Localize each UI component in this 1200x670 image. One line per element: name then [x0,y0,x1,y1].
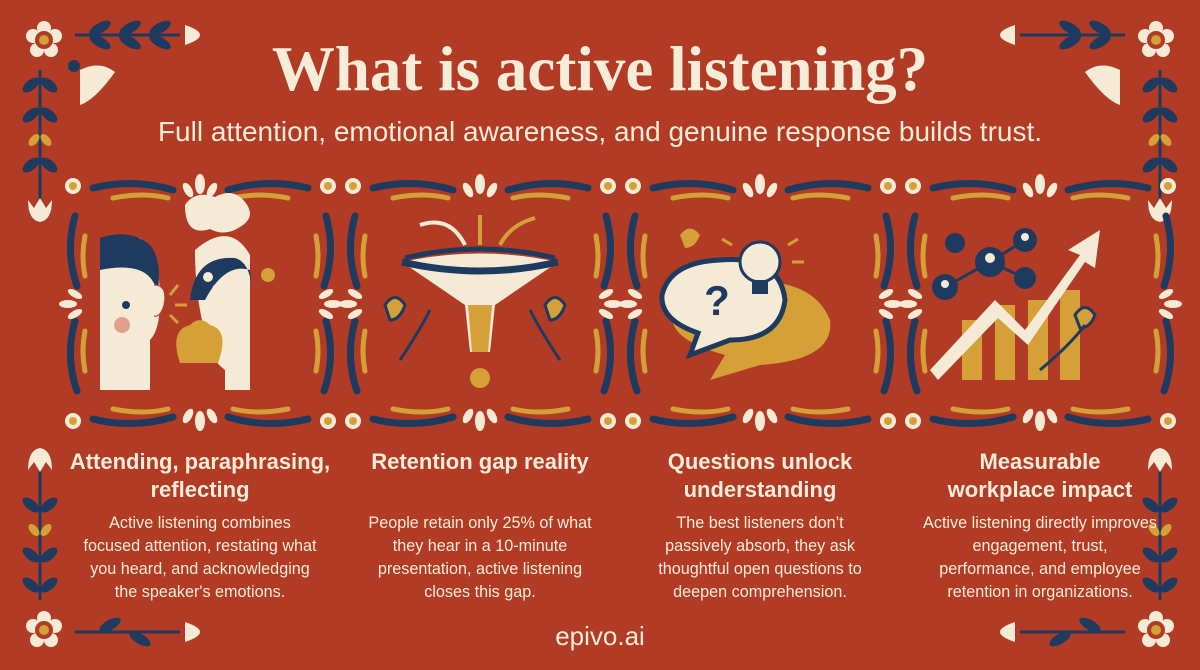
column 2 text [368,449,592,601]
title: What is active listening? [272,34,928,104]
column 2 text: People retain only 25% of what they hear in a 10-minute presentation, active listening closes this gap. [368,514,592,601]
column 1 text: Active listening combines focused attention, restating what you heard, and acknowledging the speaker's emotions. [83,514,317,601]
icon: funnel [385,215,565,388]
panel frames [59,174,1182,431]
footer brand: epivo.ai [555,621,645,651]
icon: speech bubbles with question mark and lightbulb [662,228,830,380]
subtitle: Full attention, emotional awareness, and genuine response builds trust. [158,116,1042,147]
column 3 text: Questions unlock understanding [668,449,852,502]
column 2 text: Retention gap reality [371,449,589,474]
column 4 text [923,449,1157,601]
column 1 text [70,449,330,601]
column 4 text: Active listening directly improves engagement, trust, performance, and employee retention in organizations. [923,514,1157,601]
icon: speech bubbles with question mark and lightbulb: ? [704,277,730,324]
column 4 text: Measurable workplace impact [948,449,1132,502]
column 3 text [658,449,862,601]
column 1 text: Attending, paraphrasing, reflecting [70,449,330,502]
icon: two faces listening [100,193,275,390]
icon: network and rising arrow [930,228,1100,380]
column 3 text: The best listeners don’t passively absorb, they ask thoughtful open questions to deepen comprehension. [658,514,862,601]
